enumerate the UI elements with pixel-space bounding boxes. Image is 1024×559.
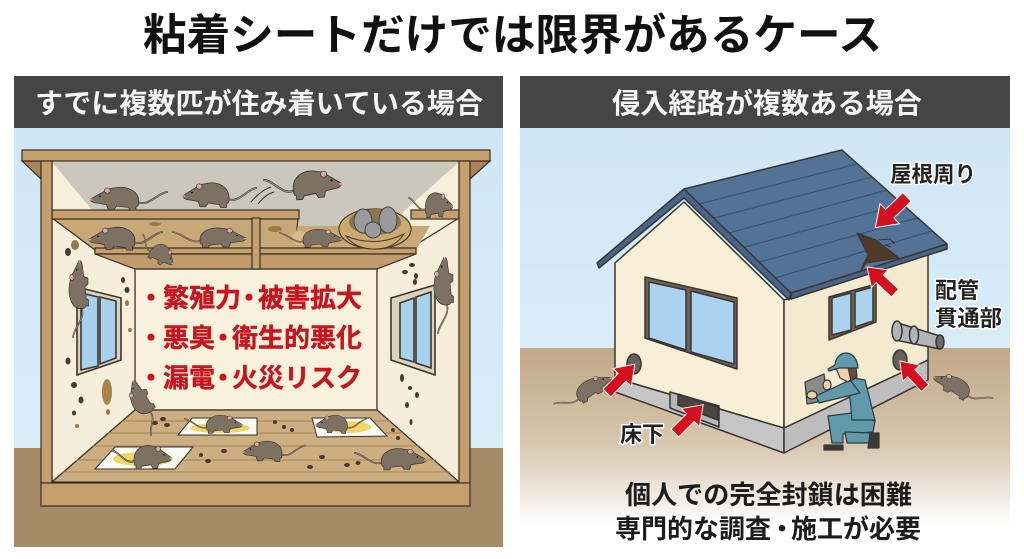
wall hole left <box>627 354 641 374</box>
sticky sheet <box>312 418 387 437</box>
damage line 3: 漏電 <box>163 363 215 393</box>
right panel background <box>520 127 1010 526</box>
right wall window <box>391 285 435 375</box>
damage line 2: 衛生的悪化 <box>232 323 362 353</box>
title: 粘着シートだけでは限界があるケース <box>143 12 882 60</box>
damage line 1: ・ <box>138 283 164 313</box>
droppings <box>65 222 419 469</box>
label: piping: 配管 <box>935 278 979 303</box>
left wall window <box>77 287 121 375</box>
rat climbing left wall <box>69 260 89 337</box>
rat on ceiling beam <box>89 227 162 250</box>
rat stuck on sheet <box>185 415 243 433</box>
conclusion line 1: 個人での完全封鎖は困難 <box>625 480 912 510</box>
damage line 3: ・ <box>138 363 164 393</box>
right panel header <box>520 76 1010 128</box>
crawl vent <box>670 392 719 427</box>
damage line 2: ・ <box>138 323 164 353</box>
cutaway room <box>22 150 490 506</box>
house <box>597 150 947 453</box>
right panel header: 侵入経路が複数ある場合 <box>612 87 922 119</box>
panel: already infested <box>14 76 503 547</box>
damage line 3: 火災リスク <box>232 363 362 393</box>
red damage list <box>138 283 362 393</box>
pipe <box>892 321 944 349</box>
left panel header: すでに複数匹が住み着いている場合 <box>35 87 483 119</box>
left panel background <box>14 127 503 547</box>
arrow: left hole <box>598 355 644 402</box>
rat stuck on sheet <box>112 446 171 469</box>
worker sealing wall <box>805 353 879 450</box>
arrow: crawl space <box>666 396 712 442</box>
front window <box>645 277 737 369</box>
rat stuck on sheet <box>316 415 366 433</box>
label: underfloor: 床下 <box>620 422 664 447</box>
damage line 1: ・ <box>236 283 262 313</box>
label: roof: 屋根周り <box>890 162 976 187</box>
rat on ceiling beam <box>173 228 246 248</box>
left panel header <box>14 76 503 128</box>
rat climbing right wall <box>434 257 454 333</box>
panel: multiple entry routes <box>520 76 1010 544</box>
rat on right ledge <box>409 193 453 218</box>
label: piping penetration: 貫通部 <box>935 306 1002 331</box>
rat at wall hole <box>553 369 616 416</box>
arrow: eave <box>859 258 903 302</box>
rat gnawing wall <box>123 377 165 437</box>
side window <box>829 284 876 340</box>
damage line 2: ・ <box>210 323 236 353</box>
rat on top shelf <box>90 187 167 210</box>
wall hole right <box>893 350 907 370</box>
leaping rat <box>264 169 342 202</box>
damage line 1: 被害拡大 <box>258 283 362 313</box>
rat on floor <box>243 441 305 462</box>
damage line 3: ・ <box>210 363 236 393</box>
damage line 2: 悪臭 <box>163 323 215 353</box>
arrow: pipe hole <box>891 353 934 396</box>
conclusion line 2: ・ <box>769 514 795 544</box>
rat right side <box>930 368 994 411</box>
rat hanging off beam <box>134 232 179 271</box>
conclusion line 2: 専門的な調査 <box>615 514 771 544</box>
damage line 1: 繁殖力 <box>163 283 241 313</box>
sticky sheet <box>178 418 257 435</box>
sticky sheet <box>95 447 193 469</box>
nest with young rats <box>339 207 411 249</box>
conclusion line 2: 施工が必要 <box>791 514 921 544</box>
motion lines of leaping rat <box>251 187 274 204</box>
arrow: roof <box>866 187 917 238</box>
rat on top shelf <box>183 183 256 208</box>
rat on floor <box>355 449 426 470</box>
rat by nest <box>280 229 342 247</box>
